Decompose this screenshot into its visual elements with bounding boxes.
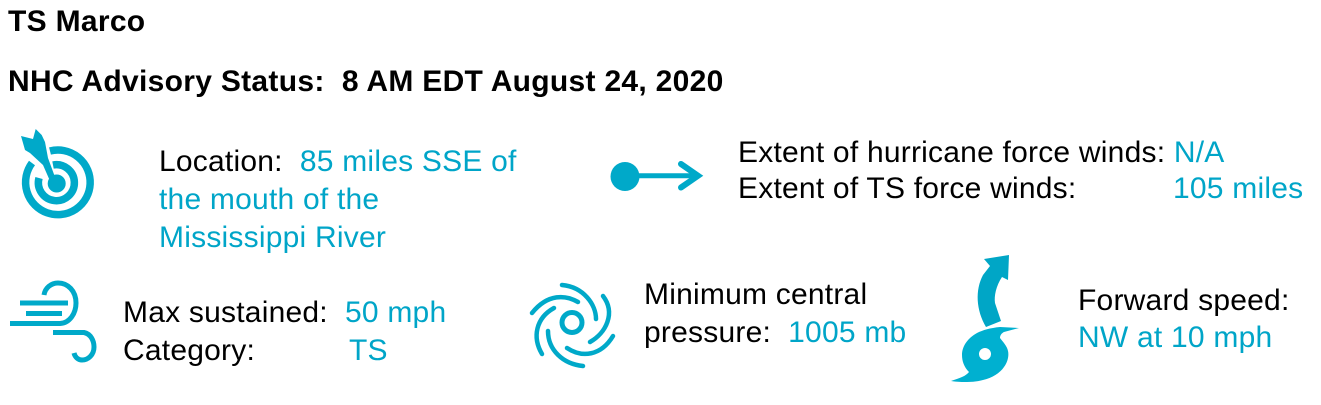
max sustained winds and category text: TS [349,334,388,367]
forward speed text: Forward speed: NW at 10 mph [1078,284,1290,354]
location text: Location: 85 miles SSE of the mouth of the Mississippi River [159,145,517,254]
wind extent text: Extent of hurricane force winds: N/A Extent of TS force winds: [738,136,1224,205]
icon: spiral pressure symbol [530,282,616,368]
max sustained winds and category text: Max sustained: 50 mph Category: [123,296,446,367]
icon: hurricane symbol [951,327,1019,382]
icon: target with arrow [21,129,94,218]
icon: wind [10,280,96,362]
title: TS Marco [8,5,145,38]
icon: arrow with dot, wind extent [610,161,704,191]
minimum central pressure text: Minimum central pressure: 1005 mb [644,278,906,349]
text: 105 miles [1173,172,1303,205]
icon: curved forward motion arrow [978,255,1009,327]
advisory status heading: NHC Advisory Status: 8 AM EDT August 24, 2020 [8,65,724,98]
